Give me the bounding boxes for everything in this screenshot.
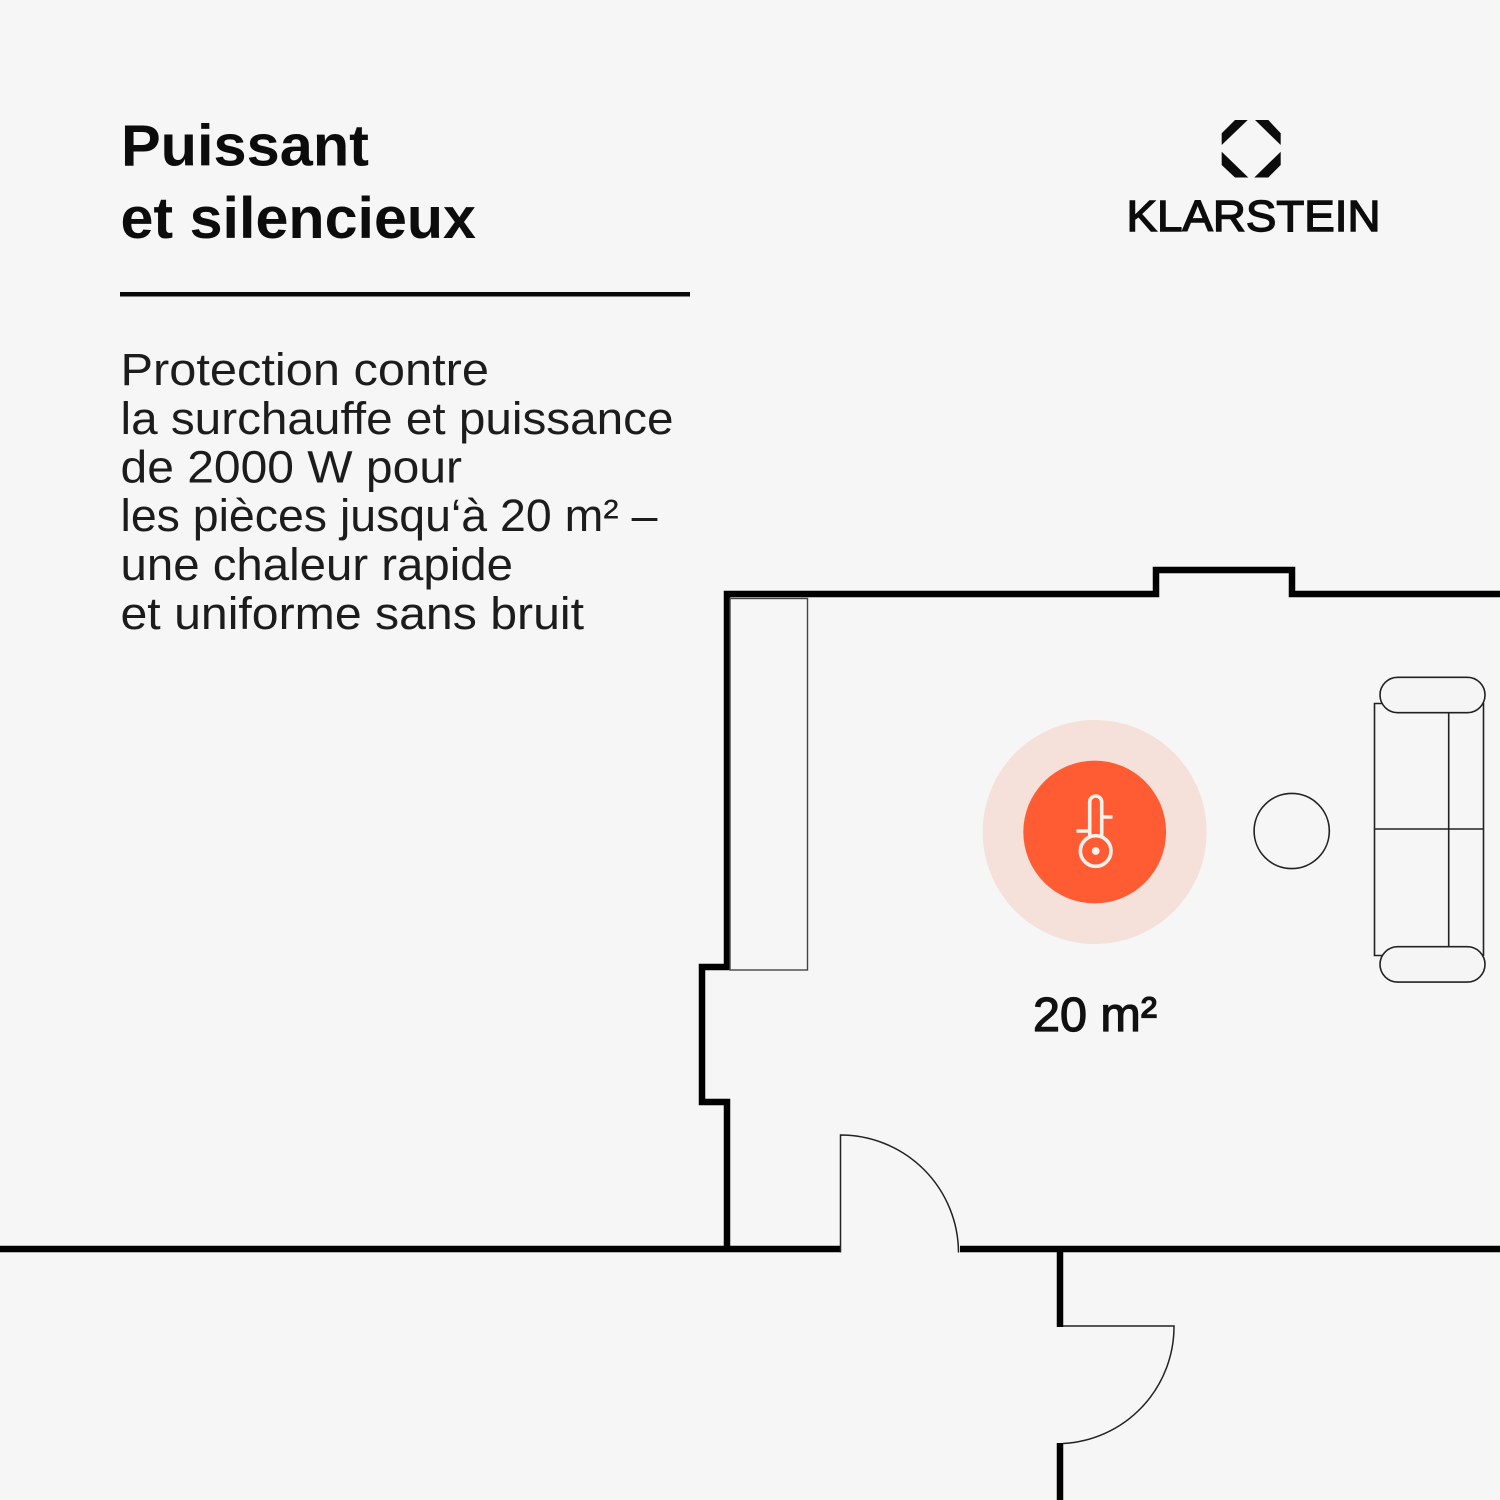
room walls (702, 570, 1500, 1249)
body text: la surchauffe et puissance (120, 393, 674, 444)
corridor wall (1057, 1249, 1063, 1500)
heater range marker (983, 720, 1207, 944)
logo: Klarstein (1126, 120, 1380, 241)
round table (1254, 793, 1329, 869)
body text: les pièces jusqu‘à 20 m² – (120, 490, 658, 541)
area label: 20 m² (1033, 989, 1157, 1042)
body text: de 2000 W pour (120, 442, 462, 492)
heading rule (120, 292, 690, 296)
body text: une chaleur rapide (120, 539, 513, 590)
icon: thermometer (1076, 796, 1112, 866)
door: room entrance (840, 1135, 958, 1252)
body text: Protection contre (120, 344, 489, 395)
floor plan (0, 570, 1500, 1500)
icon: octagon logo mark (1222, 120, 1281, 178)
title (120, 114, 476, 251)
door: corridor (1063, 1326, 1174, 1444)
sofa (1374, 677, 1485, 982)
heater circle (1023, 761, 1166, 903)
lower wall (0, 1246, 1500, 1252)
title: Puissant (121, 114, 369, 178)
heat range circle (983, 720, 1207, 944)
shelf (730, 598, 808, 970)
body text (120, 344, 674, 639)
logo wordmark: KLARSTEIN (1126, 192, 1380, 241)
body text: et uniforme sans bruit (120, 588, 585, 639)
title: et silencieux (120, 186, 476, 251)
